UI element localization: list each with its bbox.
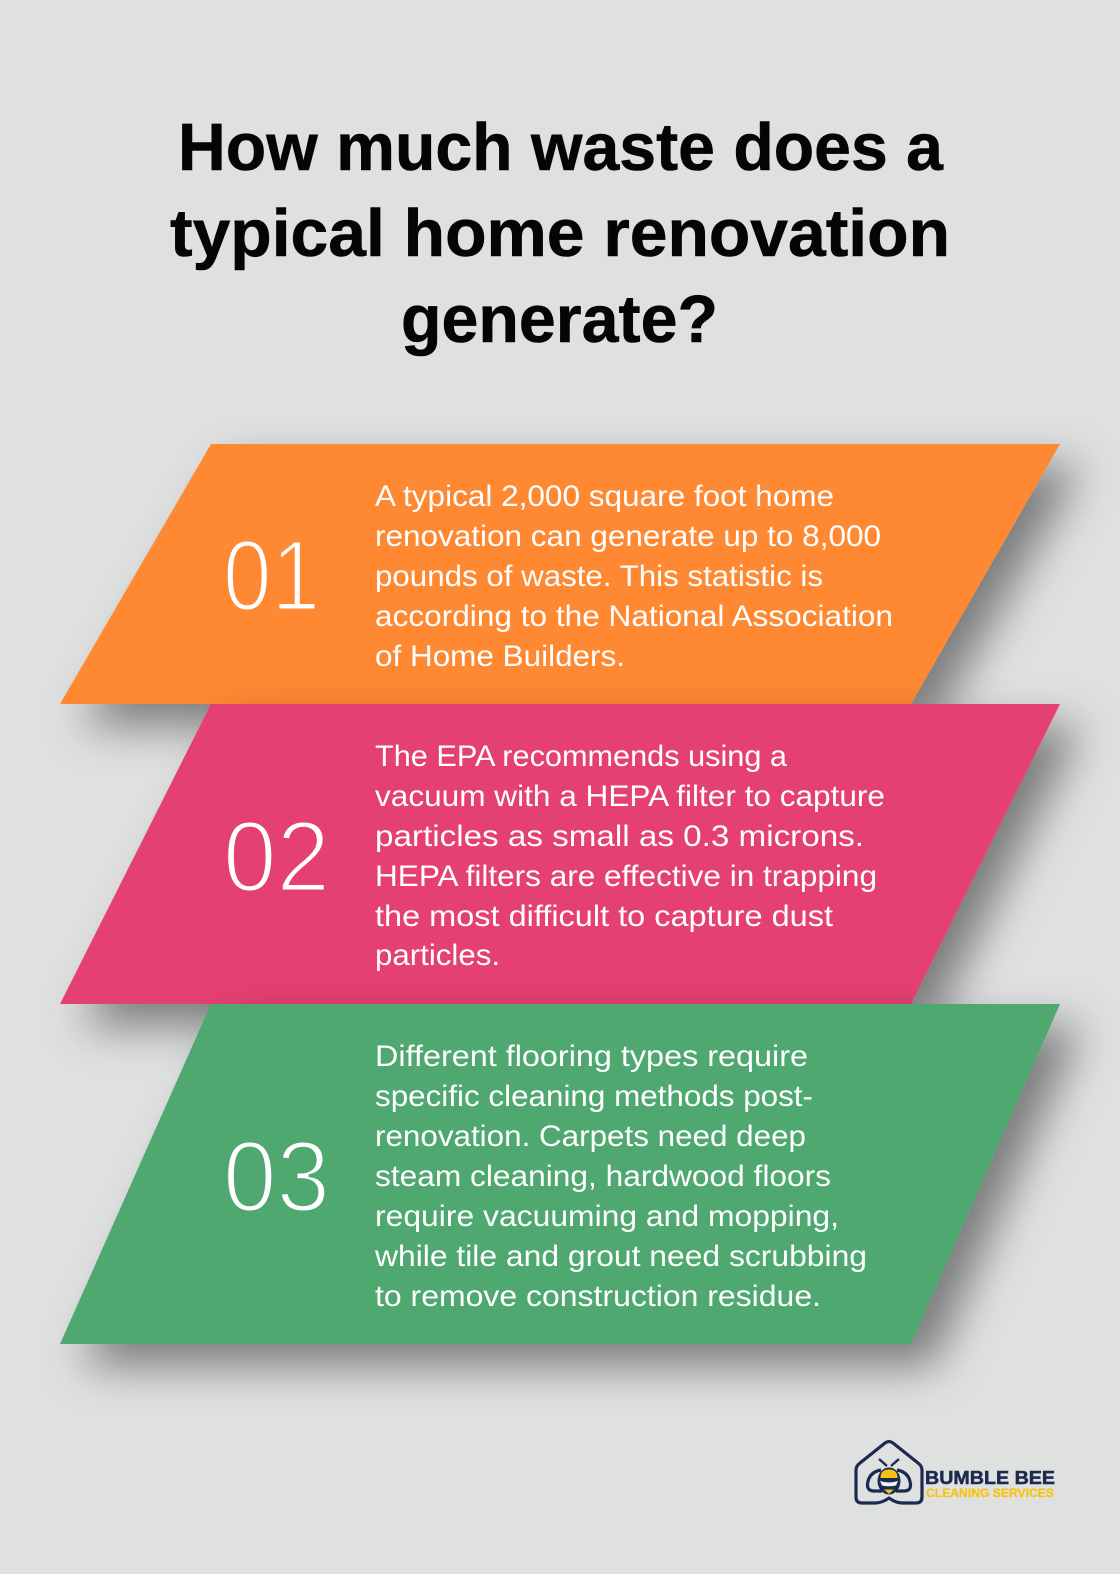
- title: typical home renovation: [170, 196, 950, 271]
- card 02 text: vacuum with a HEPA filter to capture: [375, 780, 885, 813]
- card 02 text: [375, 740, 885, 972]
- card 02 text: the most difficult to capture dust: [375, 900, 834, 933]
- card 01 text: A typical 2,000 square foot home: [375, 480, 834, 513]
- card 03 text: require vacuuming and mopping,: [375, 1200, 839, 1233]
- card 03 text: renovation. Carpets need deep: [375, 1120, 806, 1153]
- card 03 text: Different flooring types require: [375, 1040, 808, 1073]
- title: How much waste does a: [178, 110, 944, 185]
- panel: card 01 orange: [60, 444, 1060, 704]
- panel: card 02 pink: [60, 704, 1060, 1004]
- card 03 text: while tile and grout need scrubbing: [374, 1240, 867, 1273]
- card 02 text: particles as small as 0.3 microns.: [375, 820, 864, 853]
- card 03 shape: [60, 1004, 1060, 1344]
- card 01 text: pounds of waste. This statistic is: [375, 560, 823, 593]
- card 01 shape: [60, 444, 1060, 704]
- logo tagline: CLEANING SERVICES: [926, 1488, 1054, 1500]
- title: generate?: [401, 282, 718, 357]
- logo: Bumble Bee Cleaning Services: [856, 1442, 1055, 1503]
- card 03 number: 03: [223, 1121, 330, 1233]
- card 03 text: to remove construction residue.: [375, 1280, 821, 1313]
- card 01 text: of Home Builders.: [375, 640, 625, 673]
- card 01 text: according to the National Association: [375, 600, 893, 633]
- card 03 text: [374, 1040, 867, 1313]
- card 01 number: 01: [223, 520, 320, 632]
- card 01 text: [375, 480, 893, 673]
- card 03 text: specific cleaning methods post-: [375, 1080, 813, 1113]
- card 03 text: steam cleaning, hardwood floors: [375, 1160, 831, 1193]
- icon: house outline with bee: [856, 1442, 922, 1503]
- card 02 shape: [60, 704, 1060, 1004]
- panel: card 03 green: [60, 1004, 1060, 1344]
- logo wordmark: BUMBLE BEE: [925, 1467, 1055, 1488]
- card 01 text: renovation can generate up to 8,000: [375, 520, 881, 553]
- card 02 text: The EPA recommends using a: [375, 740, 787, 773]
- title: [170, 110, 950, 357]
- card 02 text: HEPA filters are effective in trapping: [375, 860, 877, 893]
- card 02 number: 02: [223, 801, 330, 913]
- card 02 text: particles.: [375, 939, 500, 972]
